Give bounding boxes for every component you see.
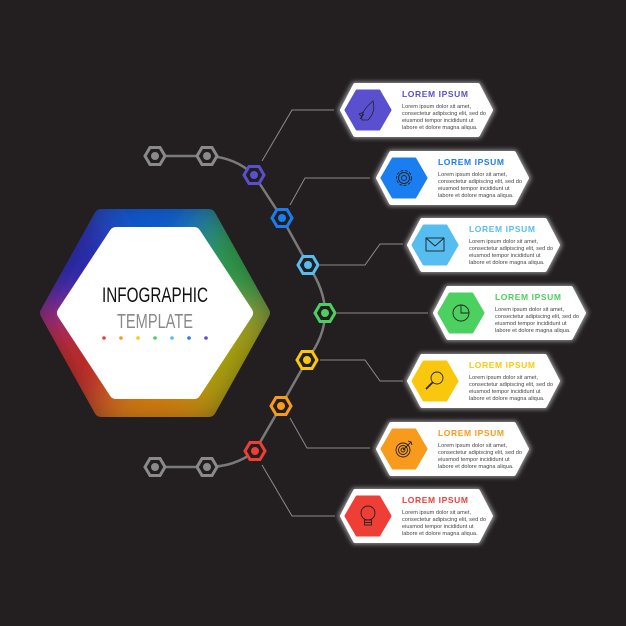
card 1: consectetur adipiscing elit, sed do [402,111,486,117]
card 6: eiusmod tempor incididunt ut [438,457,510,463]
card 7: labore et dolore magna aliqua. [402,531,478,537]
card 4: eiusmod tempor incididunt ut [495,321,567,327]
card 4 [433,287,586,339]
card 7: eiusmod tempor incididunt ut [402,524,474,530]
card 3: labore et dolore magna aliqua. [469,260,545,266]
icon: magnifier [426,372,443,389]
card 7: LOREM IPSUM [402,495,469,505]
card 3: Lorem ipsum dolor sit amet, [469,239,538,245]
icon: gear [396,170,412,186]
card 2: labore et dolore magna aliqua. [438,193,514,199]
title: INFOGRAPHIC [102,284,208,307]
card 3: eiusmod tempor incididunt ut [469,253,541,259]
card 4: labore et dolore magna aliqua. [495,328,571,334]
card 6: Lorem ipsum dolor sit amet, [438,443,507,449]
card 5 [407,355,560,407]
timeline path [155,156,325,467]
card 6: labore et dolore magna aliqua. [438,464,514,470]
card 1: LOREM IPSUM [402,89,469,99]
card 6: consectetur adipiscing elit, sed do [438,450,522,456]
card 4: Lorem ipsum dolor sit amet, [495,307,564,313]
card 3 [407,219,560,271]
icon: rocket [359,101,374,120]
icon: target [396,441,412,457]
card 4: LOREM IPSUM [495,292,562,302]
card 7 [340,490,493,542]
card 6 [376,423,529,475]
card 3: consectetur adipiscing elit, sed do [469,246,553,252]
central hexagon: TEMPLATE [117,311,193,333]
card 4: consectetur adipiscing elit, sed do [495,314,579,320]
card 3: LOREM IPSUM [469,224,536,234]
card 5: labore et dolore magna aliqua. [469,396,545,402]
card 7: consectetur adipiscing elit, sed do [402,517,486,523]
card 2: consectetur adipiscing elit, sed do [438,179,522,185]
card 5: LOREM IPSUM [469,360,536,370]
card 2 [376,152,529,204]
central hexagon [40,209,270,417]
card 1: eiusmod tempor incididunt ut [402,118,474,124]
card 5: Lorem ipsum dolor sit amet, [469,375,538,381]
card 1 [340,84,493,136]
card 5: eiusmod tempor incididunt ut [469,389,541,395]
card 1: labore et dolore magna aliqua. [402,125,478,131]
card 6: LOREM IPSUM [438,428,505,438]
icon: light bulb [361,506,375,525]
card 2: Lorem ipsum dolor sit amet, [438,172,507,178]
card 5: consectetur adipiscing elit, sed do [469,382,553,388]
card 1: Lorem ipsum dolor sit amet, [402,104,471,110]
connector lines [262,110,428,516]
card 7: Lorem ipsum dolor sit amet, [402,510,471,516]
color dots [102,336,208,340]
card 2: eiusmod tempor incididunt ut [438,186,510,192]
card 2: LOREM IPSUM [438,157,505,167]
icon: envelope [426,238,444,251]
icon: pie chart [453,305,469,321]
nodes [145,148,335,476]
